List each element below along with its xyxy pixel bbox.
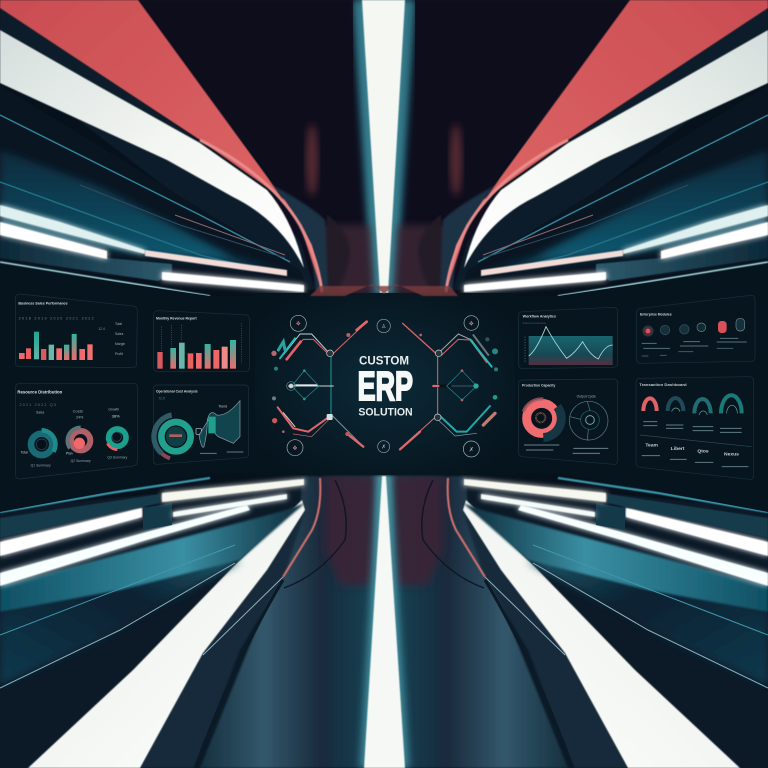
panel: three donuts: Plan — [66, 451, 73, 455]
panel: large donut and dial — [518, 379, 618, 464]
panel: four gauges and stats: Transaction Dashboard — [639, 383, 687, 387]
panel: bar chart 2: Monthly Revenue Report — [156, 316, 197, 320]
panel: three donuts: Q1 Summary — [31, 464, 51, 468]
panel: bar chart 1: Total — [115, 322, 122, 326]
panel: bar chart 2 — [154, 311, 249, 372]
panel: line chart: Annual overview — [523, 321, 547, 325]
circuit nodes: right: ❖ — [469, 321, 474, 327]
panel: bar chart 1: Margin — [115, 342, 125, 346]
tunnel: right side — [385, 0, 768, 768]
panel: six small gauges — [637, 295, 755, 363]
title: SOLUTION — [358, 406, 413, 418]
panel: line chart: Workflow Analytics — [523, 315, 556, 319]
title: CUSTOM — [359, 355, 409, 368]
panel: four gauges and stats: Nexus — [724, 451, 739, 457]
panel: large donut and dial: Production Capacity — [522, 384, 555, 388]
circuit: right — [400, 316, 495, 457]
centre diagram — [271, 315, 498, 457]
title — [358, 355, 413, 418]
panel: three donuts: Q3 Summary — [107, 456, 128, 460]
panel: large donut and dial: Output Cycle — [577, 394, 596, 398]
dashboard wall — [0, 265, 768, 512]
circuit nodes: left: ✗ — [381, 445, 386, 451]
panel: bar chart 1: 12.4 — [98, 327, 105, 331]
panel: three donuts: Resource Distribution — [17, 389, 62, 395]
panel: donut and area: Trend — [218, 404, 227, 408]
panel: bar chart 1: Sales — [115, 332, 124, 336]
panel: four gauges and stats — [636, 377, 753, 479]
panel: three donuts: Sales — [36, 410, 45, 414]
panel: three donuts: Q2 Summary — [71, 459, 91, 463]
panel: bar chart 1: 2018 2019 2020 2021 2022 — [19, 316, 94, 320]
title: ERP — [358, 363, 413, 409]
centre light column bottom — [364, 476, 405, 768]
panel: three donuts: Costs — [73, 409, 83, 414]
circuit nodes: right — [419, 321, 498, 453]
panel: donut and area: Operational Cost Analysis — [156, 390, 198, 394]
circuit nodes: left: ♙ — [381, 324, 386, 330]
panel: three donuts — [16, 383, 137, 479]
circuit nodes: left: ❖ — [292, 446, 298, 452]
panel: three donuts: 24% — [76, 416, 84, 420]
panel: four gauges and stats: Libert — [671, 446, 685, 452]
tunnel: left side — [0, 0, 383, 768]
circuit nodes: left — [271, 321, 386, 452]
panel: three donuts: Total — [21, 450, 28, 454]
panel: bar chart 1 — [16, 294, 137, 368]
panel: three donuts: Growth — [108, 408, 119, 412]
panel: bar chart 1: Business Sales Performance — [18, 302, 68, 306]
panel: four gauges and stats: Team — [645, 443, 659, 449]
panel: line chart — [519, 307, 618, 369]
centre light column top — [362, 0, 405, 293]
panel: donut and area — [153, 385, 249, 464]
panel: three donuts: 2021 2022 Q3 — [19, 402, 57, 407]
panel: four gauges and stats: Qtos — [697, 449, 709, 455]
panel: donut and area: 72.5 — [158, 396, 165, 400]
centre light column glow — [358, 0, 409, 768]
right panels — [518, 295, 755, 479]
circuit nodes: left: ❖ — [296, 321, 301, 327]
panel: bar chart 1: Profit — [115, 352, 123, 356]
panel: three donuts: 38% — [112, 413, 120, 418]
circuit: left — [278, 315, 390, 456]
panel: six small gauges: Enterprise Modules — [640, 312, 672, 316]
circuit nodes: right: ✗ — [469, 446, 474, 453]
left panels — [16, 294, 249, 479]
